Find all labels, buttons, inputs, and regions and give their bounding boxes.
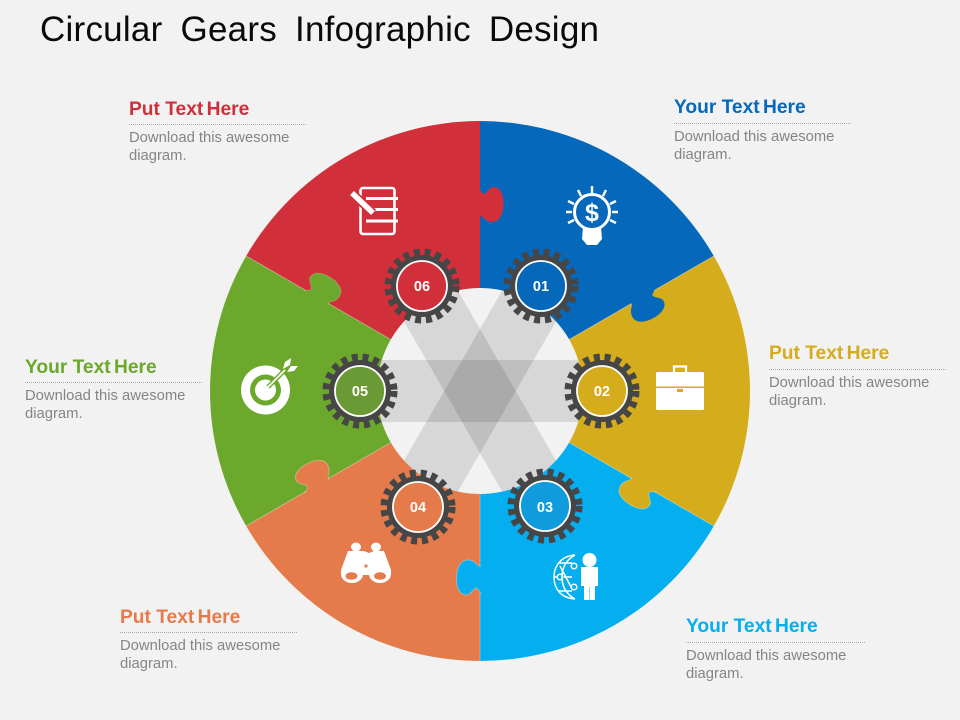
gear 06 (388, 252, 456, 320)
label: gold: Download this awesome (769, 375, 929, 391)
gear 03 (512, 472, 578, 540)
label: light blue: Your Text Here (686, 616, 818, 637)
icon: idea bulb with dollar (566, 186, 618, 245)
gear 06: 06 (414, 279, 430, 295)
label: orange: Download this awesome (120, 638, 280, 654)
icon: notepad and pencil (352, 188, 398, 234)
segment: orange (246, 391, 480, 661)
label: green: Your Text Here (25, 357, 157, 378)
label: light blue: diagram. (686, 666, 744, 682)
label: green: diagram. (25, 406, 83, 422)
puzzle tab: blue into gold (626, 288, 668, 327)
label: red: diagram. (129, 148, 187, 164)
label: gold (769, 343, 947, 409)
label: green (25, 357, 203, 422)
puzzle wheel (210, 121, 750, 661)
label: blue: diagram. (674, 147, 732, 163)
puzzle tab: red into blue (478, 187, 504, 222)
gear 02 (568, 358, 636, 424)
gear 04 (384, 474, 452, 540)
segment: light blue (480, 391, 714, 661)
gear 04: 04 (410, 500, 426, 516)
title: Circular Gears Infographic Design (40, 10, 599, 49)
label: red: Download this awesome (129, 130, 289, 146)
central hexagram hub (380, 288, 580, 494)
label: orange: Put Text Here (120, 607, 241, 628)
label: red: Put Text Here (129, 99, 250, 120)
label: light blue: Download this awesome (686, 648, 846, 664)
gear 05 (326, 358, 394, 424)
icon: idea bulb with dollar: $ (585, 199, 599, 227)
gear 02: 02 (594, 384, 610, 400)
label: gold: diagram. (769, 393, 827, 409)
label: green: Download this awesome (25, 388, 185, 404)
segment seams (246, 256, 714, 661)
icon: target with arrow (241, 358, 298, 414)
icon: briefcase (656, 366, 704, 410)
segment: green (210, 256, 480, 526)
segment: blue (480, 121, 714, 391)
gear 05: 05 (352, 384, 368, 400)
segment: red (246, 121, 480, 391)
puzzle tab: green into red (303, 269, 345, 308)
icon: binoculars (341, 542, 391, 583)
icon: globe network and person (554, 553, 598, 600)
label: orange (120, 607, 298, 672)
label: orange: diagram. (120, 656, 178, 672)
puzzle tab: gold into light blue (615, 474, 657, 513)
label: blue (674, 97, 851, 163)
gear 01: 01 (533, 279, 549, 295)
gear 01 (508, 252, 574, 320)
puzzle tab: light blue into orange (456, 560, 482, 595)
label: blue: Download this awesome (674, 129, 834, 145)
label: light blue (686, 616, 865, 682)
segment: gold (480, 256, 750, 526)
puzzle tab: orange into green (292, 455, 334, 494)
label: gold: Put Text Here (769, 343, 890, 364)
label: red (129, 99, 307, 164)
label: blue: Your Text Here (674, 97, 806, 118)
gear 03: 03 (537, 500, 553, 516)
